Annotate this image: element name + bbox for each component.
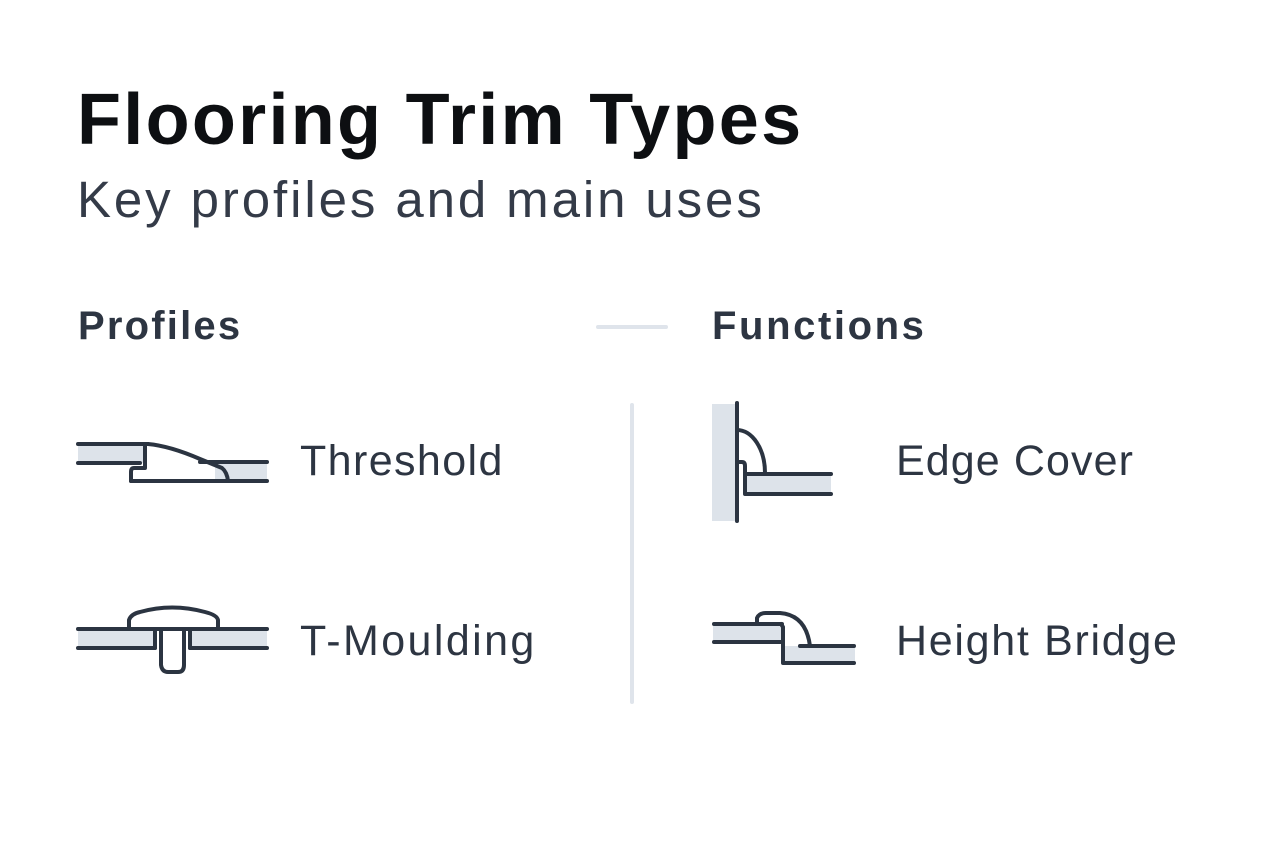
icon: edge cover bbox=[712, 403, 831, 521]
subtitle: Key profiles and main uses bbox=[77, 171, 765, 228]
label: t-moulding: T-Moulding bbox=[300, 617, 537, 665]
heading: functions: Functions bbox=[712, 304, 926, 348]
icon: threshold bbox=[78, 444, 267, 481]
icon: height bridge bbox=[713, 613, 855, 663]
label: edge cover: Edge Cover bbox=[896, 437, 1134, 485]
label: height bridge: Height Bridge bbox=[896, 617, 1179, 665]
label: threshold: Threshold bbox=[300, 437, 504, 485]
heading: profiles: Profiles bbox=[78, 304, 242, 348]
title: Flooring Trim Types bbox=[77, 80, 803, 160]
icon: t-moulding bbox=[78, 608, 267, 672]
